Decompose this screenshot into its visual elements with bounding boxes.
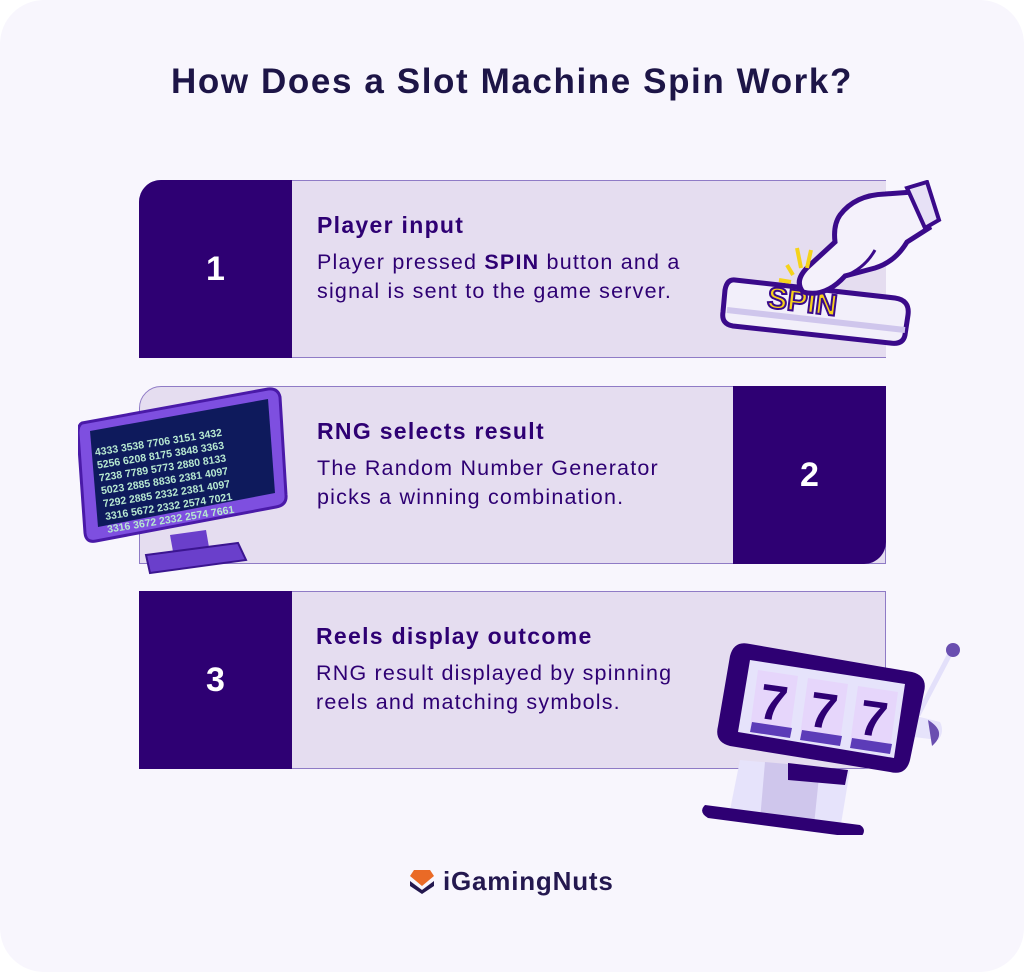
text: reels display outcome xyxy=(316,623,672,714)
text: player input xyxy=(317,212,681,303)
icon: slot machine: 7 xyxy=(756,673,791,732)
icon: logo gem xyxy=(410,870,434,894)
icon: monitor with random numbers: 7292 2885 2332 2381 4097 xyxy=(102,478,231,510)
icon: monitor with random numbers: 3316 5672 2332 2574 7021 xyxy=(104,491,233,523)
text: player input: Player pressed SPIN button and a xyxy=(317,250,681,274)
number 1 xyxy=(139,180,292,358)
icon: slot machine: 7 xyxy=(856,689,891,748)
text: rng selects result: The Random Number Generator xyxy=(317,456,659,480)
number 2: 2 xyxy=(800,456,819,494)
icon: monitor with random numbers: 5023 2885 8836 2381 4097 xyxy=(100,465,229,497)
icon: slot machine xyxy=(702,643,960,835)
icon: hand pressing spin button xyxy=(720,180,942,346)
icon: monitor with random numbers: 5256 6208 8175 3848 3363 xyxy=(96,440,225,472)
icon: monitor with random numbers: 3316 3672 2332 2574 7661 xyxy=(106,504,235,536)
text: reels display outcome: reels and matching symbols. xyxy=(316,690,621,714)
text: reels display outcome: Reels display outcome xyxy=(316,623,593,649)
text: player input: Player input xyxy=(317,212,464,238)
title: How Does a Slot Machine Spin Work? xyxy=(171,62,853,101)
text: reels display outcome: RNG result displayed by spinning xyxy=(316,661,672,685)
number 3: 3 xyxy=(206,660,225,698)
text: rng selects result: picks a winning combination. xyxy=(317,485,624,509)
number 3 xyxy=(139,591,292,769)
text: rng selects result: RNG selects result xyxy=(317,418,545,444)
icon: hand pressing spin button: SPIN xyxy=(766,282,839,323)
number 2 xyxy=(733,386,886,564)
number 1: 1 xyxy=(206,250,225,288)
logo: iGamingNuts: iGamingNuts xyxy=(443,866,614,896)
icon: monitor with random numbers: 7238 7789 5773 2880 8133 xyxy=(98,452,227,484)
icon: monitor with random numbers: 4333 3538 7706 3151 3432 xyxy=(94,427,223,459)
text: player input: signal is sent to the game server. xyxy=(317,279,672,303)
panel: step 2 xyxy=(139,386,886,564)
panel: step 1 xyxy=(139,180,886,358)
text: rng selects result xyxy=(317,418,659,509)
icon: monitor with random numbers xyxy=(78,387,288,574)
icon: slot machine: 7 xyxy=(806,681,841,740)
panel: step 3 xyxy=(139,591,886,769)
